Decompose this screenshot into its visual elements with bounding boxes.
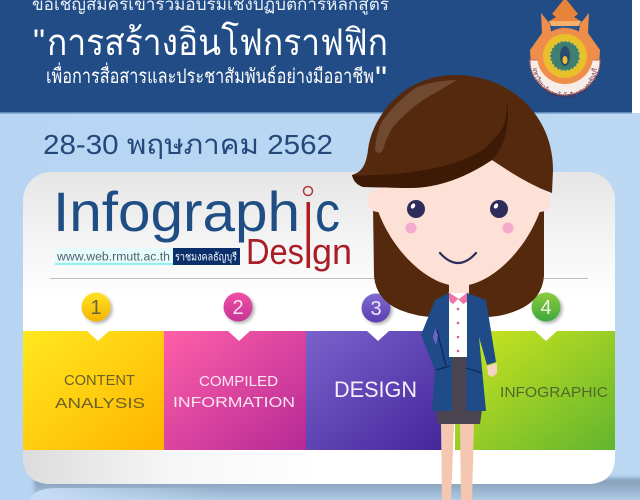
illustration: woman character [352,75,553,500]
jacket [421,293,496,411]
icon: university emblem [530,0,600,98]
step 1: content analysis: CONTENT [64,372,135,389]
panel: main card [23,172,615,484]
heading: course subtitle: เพื่อการสื่อสารและประชาสัมพันธ์อย่างมืออาชีพ [46,62,374,88]
logo: Infographic Design [53,180,352,272]
logo: Infographic Design: Infograph [53,180,300,243]
card shadow [30,478,640,500]
step 3: design: DESIGN [334,377,417,402]
step 3: design [306,294,445,450]
heading: course title: " [33,23,45,61]
header band [0,0,640,114]
step 3: design: 3 [370,298,382,320]
logo: Infographic Design: c [315,180,340,243]
logo: Infographic Design: gn [312,231,352,272]
website badge: ราชมงคลธัญบุรี [175,250,237,264]
skirt [436,410,482,424]
step 2: compiled information [164,292,306,450]
neck [449,280,469,296]
cheeks [406,222,514,234]
step 4: infographic: INFOGRAPHIC [500,384,608,401]
shirt and buttons [449,293,467,413]
website badge [55,248,240,265]
face [376,130,542,286]
eyes [407,200,508,218]
heading: course title: การสร้างอินโฟกราฟฟิก [47,21,388,63]
step 1: content analysis: ANALYSIS [55,395,145,412]
step 1: content analysis [23,292,164,450]
fringe [352,75,553,193]
collar [448,292,468,304]
step 4: infographic: 4 [540,297,552,319]
website badge: www.web.rmutt.ac.th [56,252,170,264]
ears [367,190,551,212]
step 4: infographic [455,292,615,450]
legs [441,424,474,500]
step 1: content analysis: 1 [90,297,102,319]
step 2: compiled information: INFORMATION [173,394,295,411]
heading: course subtitle: " [375,60,387,98]
heading: course subtitle [46,60,387,98]
step 2: compiled information: COMPILED [199,373,278,390]
step 2: compiled information: 2 [232,297,244,319]
back hair [373,205,544,317]
date: 28-30 พฤษภาคม 2562 [43,129,333,160]
smile [440,253,476,263]
hand [487,363,497,377]
logo: Infographic Design: Des [246,231,304,272]
icon: university emblem: มหาวิทยาลัยเทคโนโลยีราชมงคลธัญบุรี [533,68,598,98]
